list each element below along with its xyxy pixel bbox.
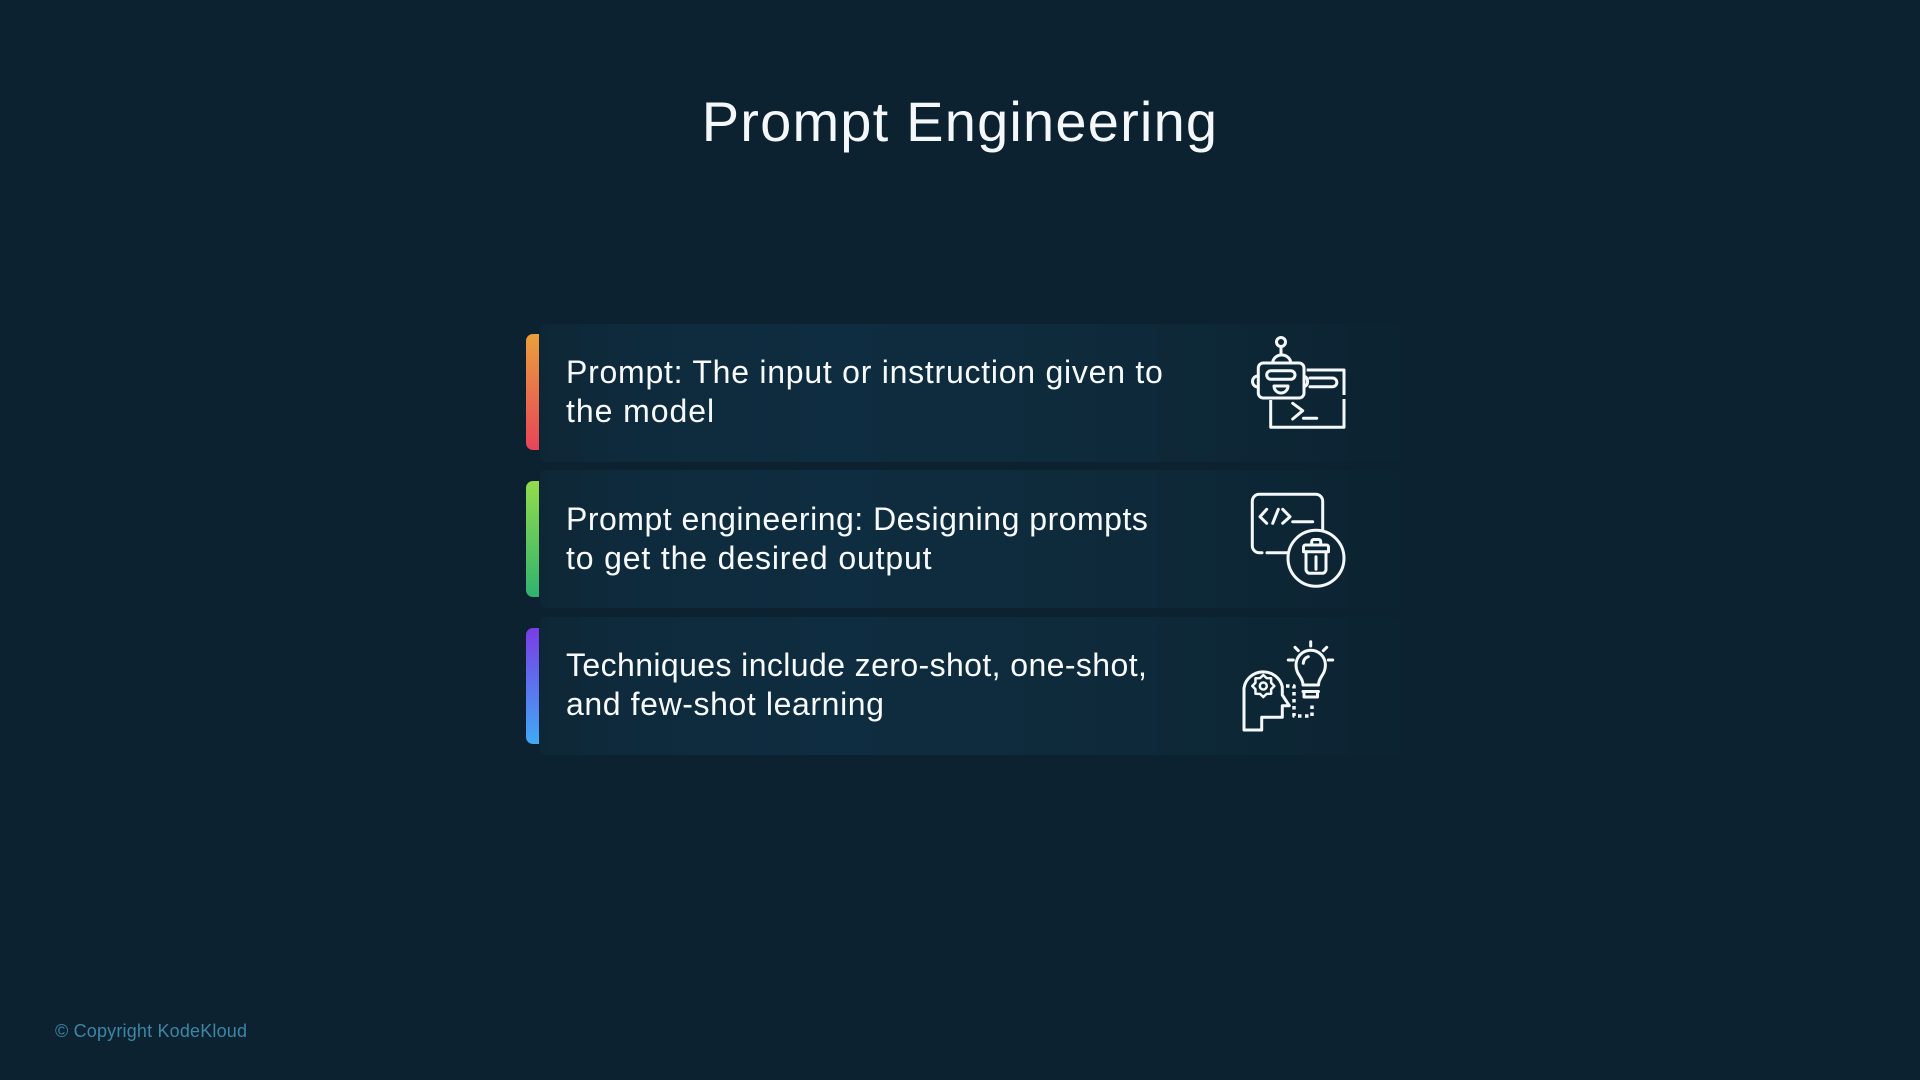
text: prompt engineering definition: to get the desired output	[566, 540, 932, 576]
text: prompt definition	[566, 354, 1164, 429]
text: prompt definition: the model	[566, 393, 715, 429]
title: Prompt Engineering	[702, 90, 1218, 153]
panel: prompt engineering	[540, 470, 1400, 608]
text: prompt engineering definition: Prompt engineering: Designing prompts	[566, 501, 1148, 537]
text: prompt engineering definition	[566, 501, 1148, 576]
panel: prompt	[540, 324, 1400, 462]
icon: head with gear and light bulb	[1244, 642, 1333, 730]
accent bar: green	[526, 481, 539, 597]
footer copyright: © Copyright KodeKloud	[55, 1021, 247, 1041]
text: techniques: and few-shot learning	[566, 686, 885, 722]
icon: robot with terminal	[1252, 338, 1344, 427]
panel: techniques	[540, 617, 1400, 755]
text: techniques	[566, 647, 1147, 722]
text: techniques: Techniques include zero-shot, one-shot,	[566, 647, 1147, 683]
accent bar: orange	[526, 334, 539, 450]
icon: code window with trash	[1252, 494, 1344, 586]
accent bar: purple blue	[526, 628, 539, 744]
text: prompt definition: Prompt: The input or instruction given to	[566, 354, 1164, 390]
